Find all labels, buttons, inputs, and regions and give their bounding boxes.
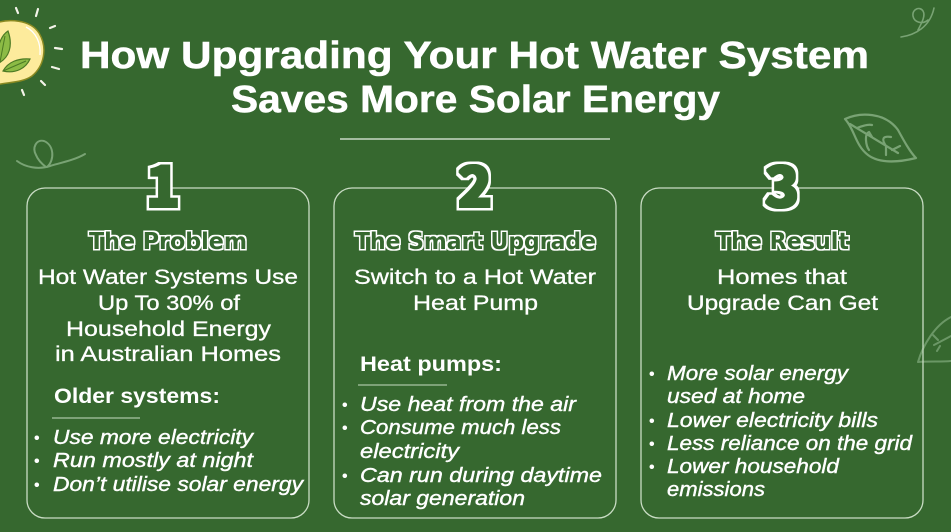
- bullet list: •: [342, 397, 348, 414]
- bullet list: Use heat from the air: [360, 393, 577, 416]
- bullet list: Use more electricity: [53, 426, 255, 449]
- bullet list: Lower household: [667, 455, 840, 478]
- subheading: heat pumps: Heat pumps:: [360, 353, 502, 376]
- title: Saves More Solar Energy: [231, 79, 720, 121]
- bullet list: electricity: [360, 440, 461, 463]
- bullet list: Consume much less: [360, 416, 561, 439]
- description: [687, 266, 878, 315]
- bullet list: [649, 362, 913, 501]
- bullet list: •: [342, 420, 348, 437]
- description: in Australian Homes: [55, 343, 281, 366]
- panel: the smart upgrade: [334, 142, 616, 518]
- decoration: curl top right: [901, 8, 934, 37]
- heading: the smart upgrade: The Smart Upgrade: [355, 229, 596, 255]
- bullet list: •: [342, 468, 348, 485]
- bullet list: emissions: [667, 478, 765, 501]
- heading: the result: The Result: [716, 229, 849, 255]
- bullet list: Don’t utilise solar energy: [53, 473, 305, 496]
- number 3: 3: [765, 142, 799, 224]
- bullet list: •: [34, 477, 40, 494]
- bullet list: •: [649, 459, 655, 476]
- bullet list: used at home: [667, 385, 805, 408]
- bullet list: •: [649, 366, 655, 383]
- description: [38, 266, 298, 366]
- bullet list: More solar energy: [667, 362, 850, 385]
- description: Up To 30% of: [98, 292, 240, 315]
- description: Switch to a Hot Water: [354, 266, 596, 289]
- bullet list: •: [649, 436, 655, 453]
- decoration: leaf right: [845, 115, 916, 161]
- bullet list: Run mostly at night: [53, 449, 254, 472]
- number 1: 1: [146, 142, 180, 224]
- bullet list: •: [649, 413, 655, 430]
- description: Homes that: [717, 266, 847, 289]
- bullet list: Lower electricity bills: [667, 409, 878, 432]
- bullet list: •: [34, 453, 40, 470]
- panel: the problem: [27, 142, 309, 518]
- heading: the problem: The Problem: [89, 229, 247, 255]
- number 2: 2: [458, 142, 492, 224]
- decoration: leaf lower right: [918, 317, 951, 362]
- description: Hot Water Systems Use: [38, 266, 298, 289]
- description: [354, 266, 596, 315]
- title: [80, 35, 869, 121]
- bullet list: •: [34, 430, 40, 447]
- bullet list: Less reliance on the grid: [667, 432, 913, 455]
- bullet list: Can run during daytime: [360, 464, 602, 487]
- subheading: older systems: Older systems:: [54, 385, 220, 408]
- description: Heat Pump: [413, 292, 538, 315]
- icon: light bulb with leaves: [0, 8, 62, 95]
- title: How Upgrading Your Hot Water System: [80, 35, 869, 77]
- panel: the result: [641, 142, 923, 518]
- bullet list: solar generation: [360, 487, 525, 510]
- bullet list: [34, 426, 305, 496]
- decoration: curl left: [17, 141, 85, 168]
- description: Upgrade Can Get: [687, 292, 878, 315]
- description: Household Energy: [66, 318, 272, 341]
- bullet list: [342, 393, 602, 510]
